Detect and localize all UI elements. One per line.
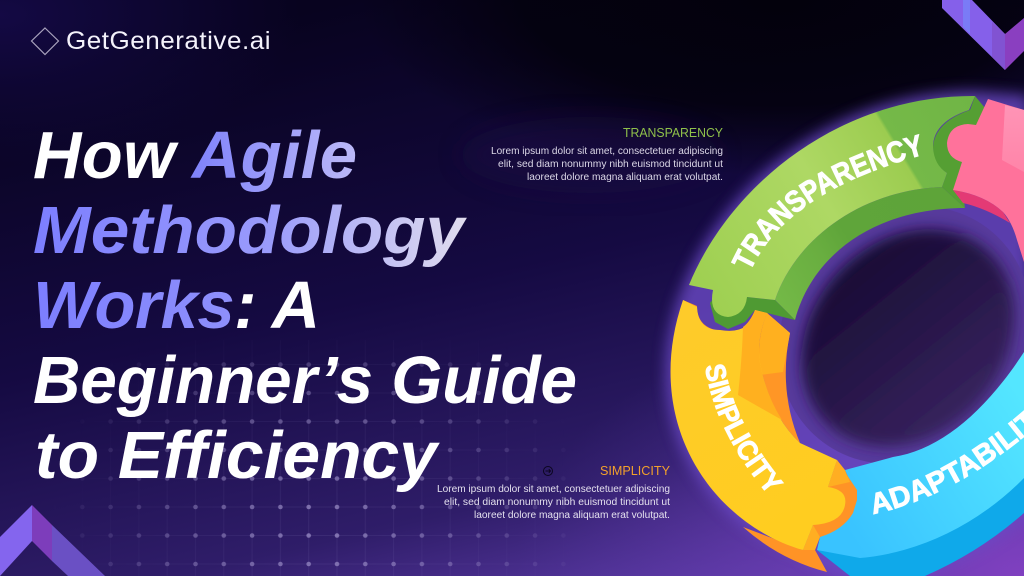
side face: inner wall: [759, 313, 800, 443]
ring segment: blue: [817, 352, 1024, 576]
side face: [953, 190, 1010, 223]
brand name: GetGenerative.ai: [66, 27, 271, 55]
ring segment: simplicity (yellow): [670, 300, 857, 572]
icon: small arrow circle: [544, 466, 552, 476]
side face: lower wedge: [743, 527, 827, 572]
text block: transparency: Lorem ipsum dolor sit amet, consectetuer adipiscing: [491, 146, 723, 157]
text block: transparency: laoreet dolore magna aliquam erat volutpat.: [527, 172, 723, 183]
label: SIMPLICITY: [706, 364, 784, 491]
text block: transparency: TRANSPARENCY: [623, 125, 723, 140]
text block: transparency: [491, 125, 723, 183]
top face: [689, 96, 975, 317]
title: Works: A: [33, 268, 320, 343]
ring segment: transparency (green): [689, 96, 984, 329]
text block: simplicity: elit, sed diam nonummy nibh euismod tincidunt ut: [444, 497, 670, 508]
title: Beginner’s Guide: [33, 343, 577, 418]
text block: simplicity: Lorem ipsum dolor sit amet, consectetuer adipiscing: [437, 484, 670, 495]
ring glow: [671, 96, 1024, 576]
notch: [683, 300, 721, 332]
top face: [671, 300, 845, 550]
logo: [32, 27, 271, 55]
text block: simplicity: laoreet dolore magna aliquam erat volutpat.: [474, 510, 670, 521]
title: [33, 118, 577, 493]
side face: [775, 187, 965, 320]
icon: diamond: [32, 28, 58, 54]
top face: [947, 99, 1024, 262]
title: Methodology: [33, 193, 468, 268]
tab inner: [933, 96, 985, 208]
top face: [817, 352, 1024, 558]
title: to Efficiency: [35, 418, 441, 493]
side face: [817, 470, 1024, 576]
chevron: top right: [942, 0, 1024, 70]
dot grid: [80, 362, 565, 576]
text block: simplicity: [437, 463, 670, 521]
title: How Agile: [33, 118, 357, 193]
label: TRANSPARENCY: [730, 134, 920, 267]
text block: transparency: elit, sed diam nonummy nibh euismod tincidunt ut: [498, 159, 723, 170]
text block: simplicity: SIMPLICITY: [600, 463, 670, 478]
ring segment: pink: [947, 99, 1024, 262]
tab shadow: [803, 460, 857, 550]
chevron: bottom left: [0, 505, 105, 576]
